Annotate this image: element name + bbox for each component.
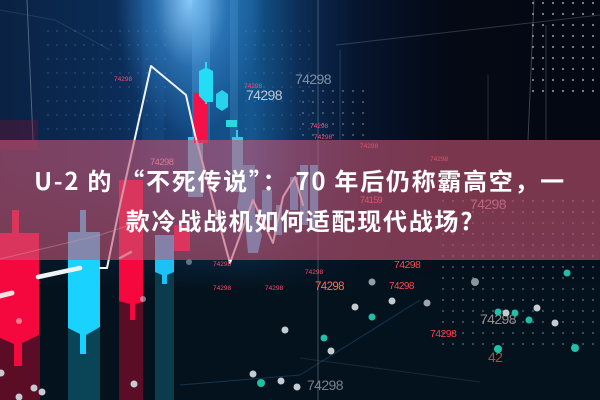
background: financial candlestick chart: 74298 bbox=[114, 76, 132, 83]
blue candle bbox=[155, 235, 174, 284]
background: financial candlestick chart: 74298 bbox=[213, 285, 231, 292]
scatter dots bbox=[0, 259, 558, 400]
background: financial candlestick chart: 74298 bbox=[265, 285, 283, 292]
price labels: 74298 bbox=[389, 281, 415, 292]
background: financial candlestick chart: 74298 bbox=[213, 261, 231, 268]
teal dots bbox=[257, 270, 579, 387]
price labels: 74298 bbox=[394, 259, 421, 271]
background: financial candlestick chart: 74298 bbox=[310, 123, 328, 130]
price labels: 42 bbox=[488, 349, 503, 365]
blue-grey candle: right bbox=[232, 130, 243, 192]
red candle: narrow bbox=[174, 225, 190, 251]
price labels: 74298 bbox=[295, 71, 332, 87]
candle shadows fading to bottom bbox=[0, 120, 174, 400]
cyan candle bbox=[68, 210, 100, 354]
background: financial candlestick chart: 74298 bbox=[314, 134, 332, 141]
translucent title band bbox=[0, 140, 600, 260]
white price line bbox=[0, 66, 303, 296]
price labels: 74159 bbox=[360, 195, 383, 205]
price labels: 74298 bbox=[430, 328, 457, 340]
price labels: 74298 bbox=[480, 311, 517, 327]
price labels: 74298 bbox=[315, 281, 344, 293]
title: U-2 的 “不死传说”： 70 年后仍称霸高空，一 bbox=[34, 162, 566, 197]
price labels: 74298 bbox=[470, 196, 507, 212]
cyan small candle bbox=[226, 120, 237, 127]
background: financial candlestick chart: 74298 bbox=[305, 269, 323, 276]
title bbox=[34, 162, 566, 237]
price labels: 74298 bbox=[307, 377, 344, 393]
cyan candle: upper bbox=[199, 62, 213, 104]
price labels: 74298 bbox=[246, 87, 283, 103]
background: financial candlestick chart: 74298 bbox=[244, 83, 262, 90]
red candle: far left bbox=[0, 210, 39, 366]
candlesticks bbox=[0, 62, 318, 366]
price labels bbox=[150, 71, 517, 393]
title: 款冷战战机如何适配现代战场? bbox=[126, 202, 474, 237]
background: financial candlestick chart: 74298 bbox=[360, 143, 378, 150]
red candle: centre left bbox=[119, 180, 143, 320]
price labels: 74298 bbox=[150, 157, 174, 168]
red candle: upper bbox=[194, 93, 208, 143]
cyan hexagon candle bbox=[216, 90, 228, 111]
blue candle cluster bbox=[237, 165, 318, 253]
blue-grey candle bbox=[188, 137, 203, 197]
background: financial candlestick chart: 74298 bbox=[430, 156, 448, 163]
